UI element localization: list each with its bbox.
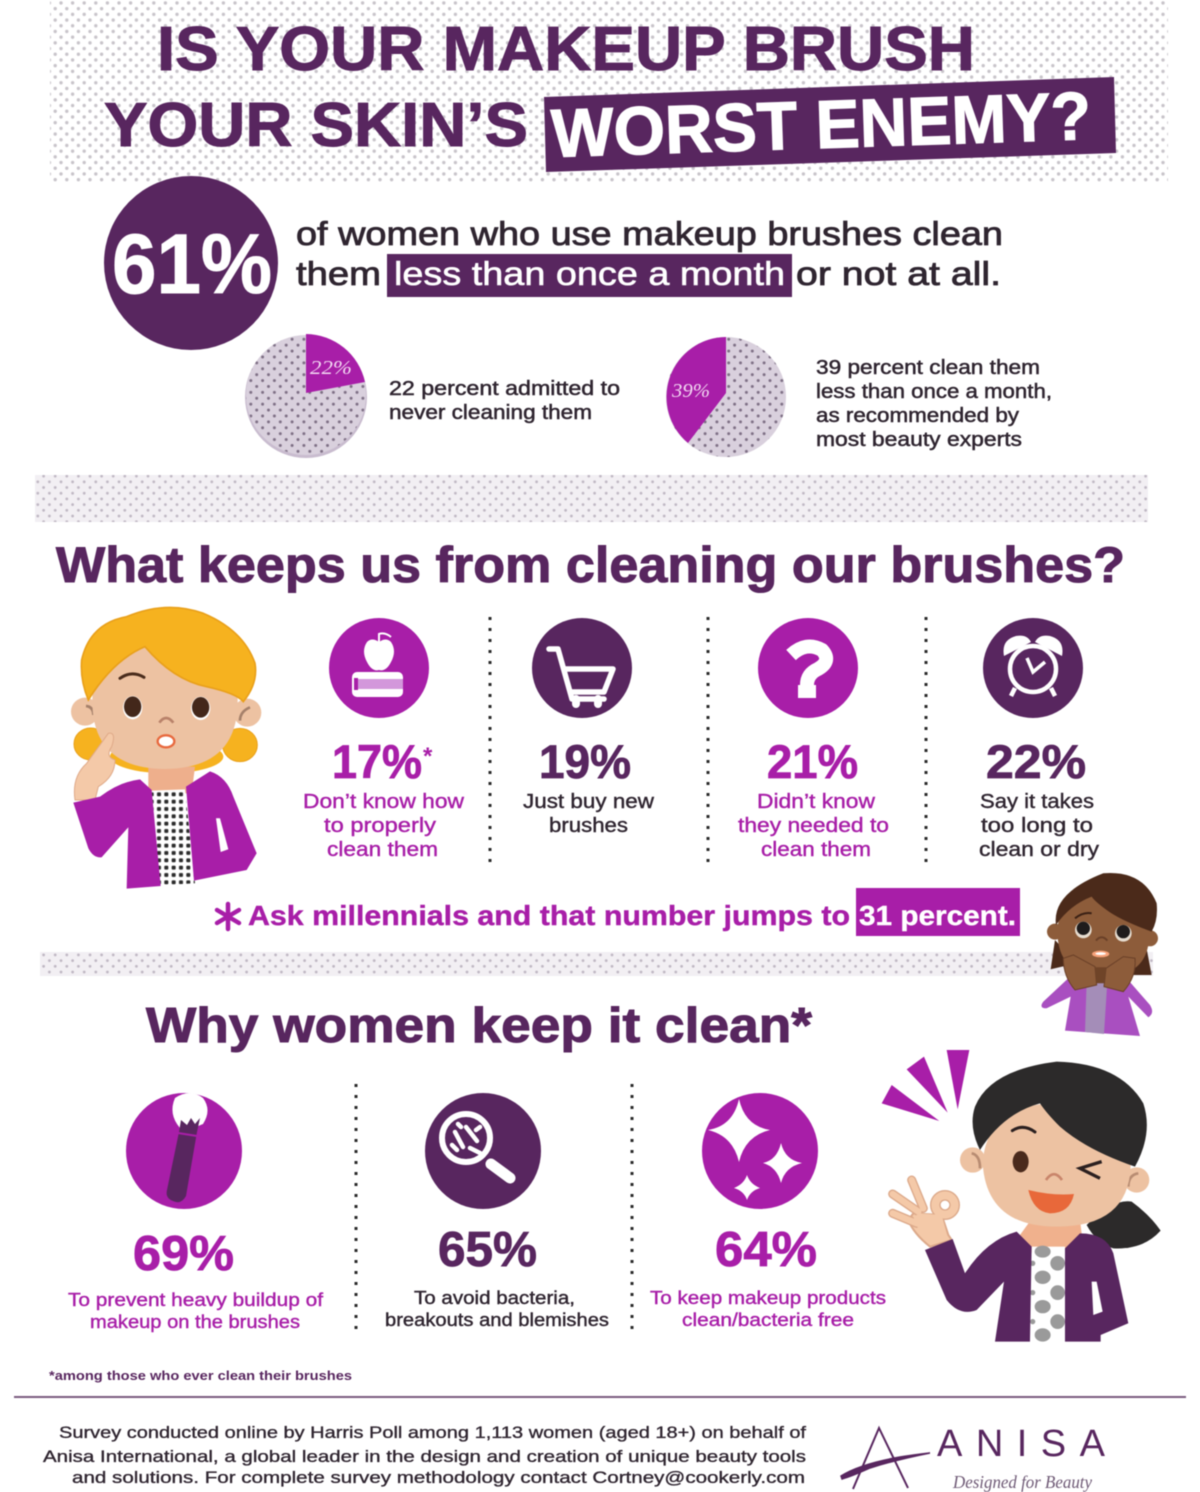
icon: makeup brush: [126, 1093, 242, 1209]
reason: takes too long: Say it takes: [980, 791, 1094, 813]
caption: 22 percent: 22 percent admitted to: [389, 378, 620, 400]
reason columns: [303, 618, 1099, 861]
caption: 39 percent: as recommended by: [816, 405, 1019, 427]
pie chart: 39 percent: 39%: [671, 380, 710, 402]
reason: takes too long: too long to: [981, 815, 1093, 837]
heading: why women keep it clean: Why women keep it clean*: [146, 999, 813, 1053]
survey note: [43, 1423, 806, 1487]
reason: buy new brushes: [523, 618, 655, 837]
motive: keep products clean: 64%: [715, 1223, 817, 1277]
reason: takes too long: clean or dry: [979, 839, 1099, 861]
motive: prevent buildup: makeup on the brushes: [90, 1312, 300, 1332]
reason: don't know how: clean them: [327, 839, 438, 861]
heading: what keeps us: What keeps us from cleaning our brushes?: [56, 537, 1125, 593]
reason: takes too long: 22%: [986, 735, 1086, 788]
reason: don't know how: Don’t know how: [303, 791, 465, 813]
reason: didn't know: Didn’t know: [757, 791, 876, 813]
reason: don't know how: *: [423, 743, 433, 770]
caption: 22 percent: never cleaning them: [389, 402, 592, 424]
statement text: of women who use makeup brushes clean: [296, 215, 1003, 252]
caption: 39 percent: [816, 357, 1052, 451]
callout: millennials: Ask millennials and that number jumps to: [248, 900, 850, 931]
heading line 1: IS YOUR MAKEUP BRUSH: [157, 15, 975, 84]
reason: don't know how: 17%: [332, 735, 422, 788]
icon: shopping cart: [532, 618, 632, 718]
caption: 39 percent: less than once a month,: [816, 381, 1052, 403]
logo: Anisa: [841, 1423, 1106, 1492]
callout: millennials: 31 percent.: [859, 900, 1016, 931]
character: winking woman: [882, 1050, 1161, 1342]
footnote: *among those who ever clean their brushes: [49, 1369, 352, 1383]
reason: buy new brushes: 19%: [539, 735, 631, 788]
statement text: [296, 215, 1003, 297]
caption: 39 percent: 39 percent clean them: [816, 357, 1040, 379]
motive: avoid bacteria: breakouts and blemishes: [385, 1310, 609, 1330]
icon: large asterisk: [217, 904, 239, 929]
motive: keep products clean: [650, 1093, 886, 1330]
icon: magnifier with bacteria: [425, 1093, 541, 1209]
reason: don't know how: to properly: [324, 815, 436, 837]
icon: question mark: [758, 618, 858, 718]
logo: Anisa: Designed for Beauty: [952, 1472, 1092, 1492]
reason: didn't know: they needed to: [738, 815, 889, 837]
statement text: or not at all.: [796, 255, 1001, 292]
reason: didn't know: clean them: [761, 839, 871, 861]
caption: 39 percent: most beauty experts: [816, 429, 1022, 451]
reason: buy new brushes: Just buy new: [523, 791, 655, 813]
panel: title: [50, 0, 1168, 182]
pie chart: 22 percent: 22%: [310, 357, 352, 379]
character: worried woman: [1041, 873, 1158, 1036]
motive: prevent buildup: 69%: [133, 1227, 234, 1281]
icon: alarm clock: [983, 618, 1083, 718]
badge: 61%: [104, 176, 278, 350]
panel: 61 percent statistic: [104, 176, 1003, 350]
statement text: them: [296, 255, 381, 292]
motive: prevent buildup: To prevent heavy buildup of: [68, 1290, 324, 1310]
motive: prevent buildup: [68, 1093, 324, 1332]
reason: didn't know: [738, 618, 889, 861]
caption: 22 percent: [389, 378, 620, 424]
pie chart: 22 percent: [245, 334, 367, 458]
icon: apple and books: [329, 618, 429, 718]
motive: avoid bacteria: [385, 1093, 609, 1330]
motive: keep products clean: To keep makeup products: [650, 1288, 886, 1308]
banner: worst enemy: WORST ENEMY?: [550, 78, 1092, 172]
callout: millennials: [217, 888, 1020, 936]
pie chart: 39 percent: [666, 337, 786, 457]
icon: sparkles: [702, 1093, 818, 1209]
statement text: less than once a month: [394, 255, 785, 292]
reason: takes too long: [979, 618, 1099, 861]
survey note: and solutions. For complete survey methodology contact Cortney@cookerly.com: [72, 1468, 805, 1487]
motive: avoid bacteria: To avoid bacteria,: [414, 1288, 575, 1308]
logo: Anisa: ANISA: [937, 1423, 1106, 1465]
survey note: Anisa International, a global leader in the design and creation of unique beauty tools: [43, 1447, 806, 1466]
reason: buy new brushes: brushes: [549, 815, 628, 837]
character: blonde woman: [71, 607, 261, 889]
icon: OK hand: [893, 1180, 955, 1247]
survey note: Survey conducted online by Harris Poll among 1,113 women (aged 18+) on behalf of: [59, 1423, 806, 1442]
heading line 2: YOUR SKIN’S: [104, 91, 528, 160]
reason: don't know how: [303, 618, 465, 861]
motive: avoid bacteria: 65%: [438, 1223, 537, 1277]
icon: emphasis rays: [882, 1050, 969, 1121]
badge: 61%: 61%: [112, 217, 272, 311]
reason: didn't know: 21%: [767, 735, 858, 788]
motive: keep products clean: clean/bacteria free: [682, 1310, 854, 1330]
